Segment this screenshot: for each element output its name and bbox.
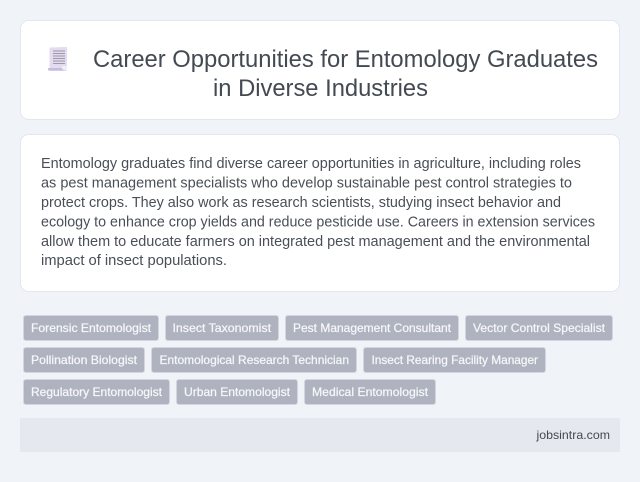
title	[93, 46, 598, 102]
tag: Urban Entomologist: Urban Entomologist	[184, 385, 291, 399]
tag: Vector Control Specialist	[466, 316, 612, 340]
tag: Insect Taxonomist	[166, 316, 278, 340]
tag: Vector Control Specialist: Vector Control Specialist	[473, 321, 606, 335]
tag: Pollination Biologist	[24, 348, 144, 372]
panel: description	[20, 134, 620, 292]
tag: Forensic Entomologist	[24, 316, 158, 340]
tag: Regulatory Entomologist	[24, 380, 170, 404]
tag: Pollination Biologist: Pollination Biologist	[31, 353, 138, 367]
tag: Pest Management Consultant	[286, 316, 458, 340]
description text: protect crops. They also work as research scientists, studying insect behavior and	[41, 195, 561, 211]
tag: Urban Entomologist	[176, 380, 298, 404]
tag: Forensic Entomologist: Forensic Entomologist	[31, 321, 152, 335]
description text: Entomology graduates find diverse career opportunities in agriculture, including roles	[41, 156, 581, 172]
description text: as pest management specialists who develop sustainable pest control strategies to	[41, 176, 572, 192]
footer bar	[20, 418, 620, 452]
tag: Medical Entomologist: Medical Entomologist	[312, 385, 429, 399]
tag: Insect Rearing Facility Manager	[364, 348, 546, 372]
tag: Insect Rearing Facility Manager: Insect Rearing Facility Manager	[372, 353, 538, 367]
tag: Regulatory Entomologist: Regulatory Entomologist	[31, 385, 163, 399]
career tags	[24, 316, 612, 404]
description text	[41, 156, 595, 269]
description text: allow them to educate farmers on integrated pest management and the environmental	[41, 234, 590, 250]
tag: Insect Taxonomist: Insect Taxonomist	[172, 321, 272, 335]
description text: ecology to enhance crop yields and reduce pesticide use. Careers in extension services	[41, 214, 595, 230]
icon: paper scroll	[48, 47, 67, 71]
tag: Entomological Research Technician: Entomological Research Technician	[160, 353, 349, 367]
description text: impact of insect populations.	[41, 253, 227, 269]
tag: Pest Management Consultant: Pest Management Consultant	[293, 321, 452, 335]
panel: header	[20, 20, 620, 120]
title: in Diverse Industries	[213, 75, 428, 102]
title: Career Opportunities for Entomology Graduates	[93, 46, 598, 73]
tag: Entomological Research Technician	[152, 348, 356, 372]
tag: Medical Entomologist	[304, 380, 436, 404]
footer source: jobsintra.com	[535, 428, 610, 442]
